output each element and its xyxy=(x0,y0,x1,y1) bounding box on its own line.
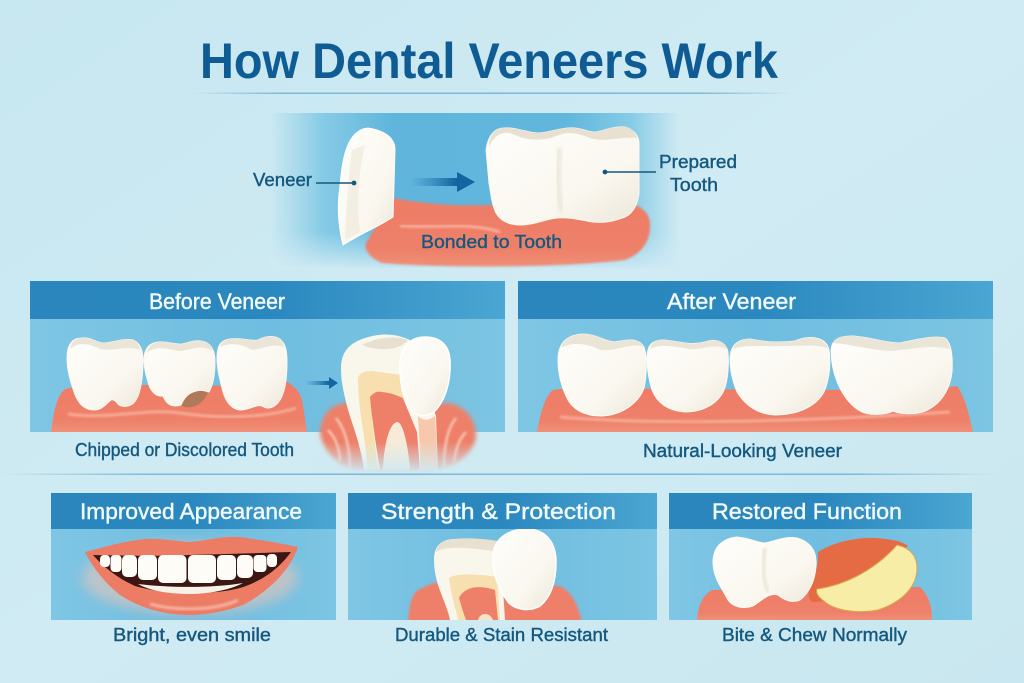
gum section xyxy=(320,403,476,472)
panel background xyxy=(518,319,993,432)
panel: restored function xyxy=(669,493,972,620)
heading: Restored Function xyxy=(712,499,902,524)
icon: tooth 1 xyxy=(67,338,143,410)
icon: tooth 4 xyxy=(831,336,952,414)
bottom fade xyxy=(312,442,484,474)
right root xyxy=(418,416,438,470)
caption: before: Chipped or Discolored Tooth xyxy=(75,439,294,460)
occlusal cap xyxy=(362,338,408,349)
dentin xyxy=(358,371,404,470)
header bar xyxy=(348,493,657,529)
root canal xyxy=(383,422,410,470)
header bar xyxy=(669,493,972,529)
pulp xyxy=(370,392,420,470)
title: How Dental Veneers Work xyxy=(200,33,778,89)
icon: tooth with veneer xyxy=(408,529,582,622)
caption: improved appearance: Bright, even smile xyxy=(113,624,271,645)
heading: After Veneer xyxy=(667,289,796,314)
caption: restored function: Bite & Chew Normally xyxy=(722,624,908,645)
veneer on tooth xyxy=(400,337,450,415)
mouth xyxy=(93,552,291,593)
label: veneer xyxy=(253,169,356,190)
icon: prepared tooth xyxy=(486,127,639,225)
panel background xyxy=(669,529,972,620)
panel: veneer diagram xyxy=(253,113,737,270)
header bar xyxy=(30,281,505,319)
icon: tooth 2 xyxy=(647,340,728,412)
panel: before veneer xyxy=(30,281,505,474)
label: prepared tooth xyxy=(603,151,737,195)
icon: chipped tooth xyxy=(144,341,215,407)
panel: strength and protection xyxy=(348,493,657,622)
arrow xyxy=(305,377,338,389)
header bar xyxy=(51,493,336,529)
label: prepared tooth: Prepared xyxy=(659,151,737,172)
caption: after: Natural-Looking Veneer xyxy=(643,440,842,461)
label: veneer: Veneer xyxy=(253,169,312,190)
gum xyxy=(366,198,650,266)
panel glow xyxy=(270,113,680,268)
panel background xyxy=(51,529,336,620)
icon: tooth cross-section with veneer xyxy=(312,334,484,474)
label: prepared tooth: Tooth xyxy=(670,174,718,195)
icon: apple slice xyxy=(809,538,917,612)
panel: after veneer xyxy=(518,281,993,432)
icon: molar tooth xyxy=(713,537,816,608)
panel: improved appearance xyxy=(51,493,336,620)
heading: Before Veneer xyxy=(149,289,285,314)
arrow xyxy=(411,172,475,192)
icon: tooth 1 xyxy=(558,334,646,416)
upper teeth xyxy=(100,554,277,583)
heading: Strength & Protection xyxy=(381,499,616,524)
gum row xyxy=(537,386,973,432)
icon: smile xyxy=(82,537,298,615)
heading: Improved Appearance xyxy=(80,499,302,524)
gum xyxy=(697,587,932,620)
icon: tooth 3 xyxy=(217,336,287,410)
panel background xyxy=(348,529,657,620)
icon: tooth 3 xyxy=(730,338,830,415)
panel background xyxy=(30,319,505,432)
gum row xyxy=(51,381,307,432)
icon: veneer shell xyxy=(338,128,395,245)
caption: strength and protection: Durable & Stain Resistant xyxy=(395,624,608,645)
lower teeth xyxy=(138,583,243,594)
label: bonded to tooth: Bonded to Tooth xyxy=(421,231,562,252)
tooth crown and root xyxy=(341,334,438,470)
header bar xyxy=(518,281,993,319)
lips xyxy=(85,537,298,615)
